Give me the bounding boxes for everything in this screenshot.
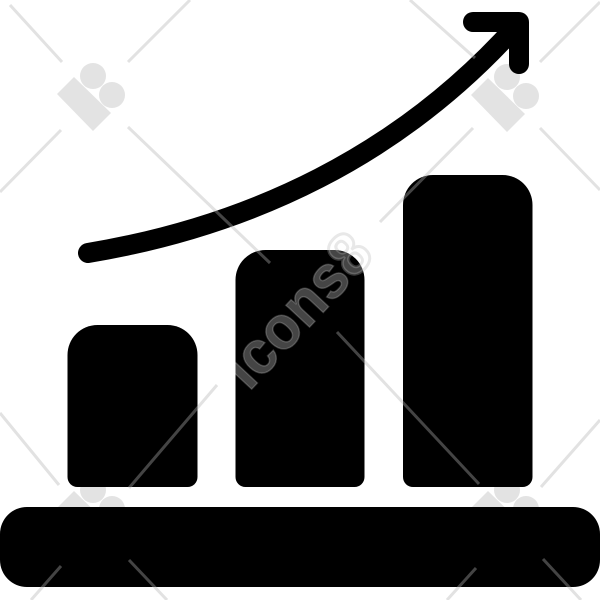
logo top left [57,63,125,131]
watermark logos behind base [57,63,539,545]
bar 1 [68,325,198,487]
arrow head [473,22,519,64]
growth arrow [88,22,519,253]
bar 3 [403,175,532,487]
base bar [0,507,600,587]
logo bottom right [471,477,539,545]
logo top right [471,64,539,132]
watermark text: Icons8 [209,219,385,401]
bar 2 [236,250,364,487]
arrow curve [88,25,517,253]
logo bottom left [57,477,125,545]
